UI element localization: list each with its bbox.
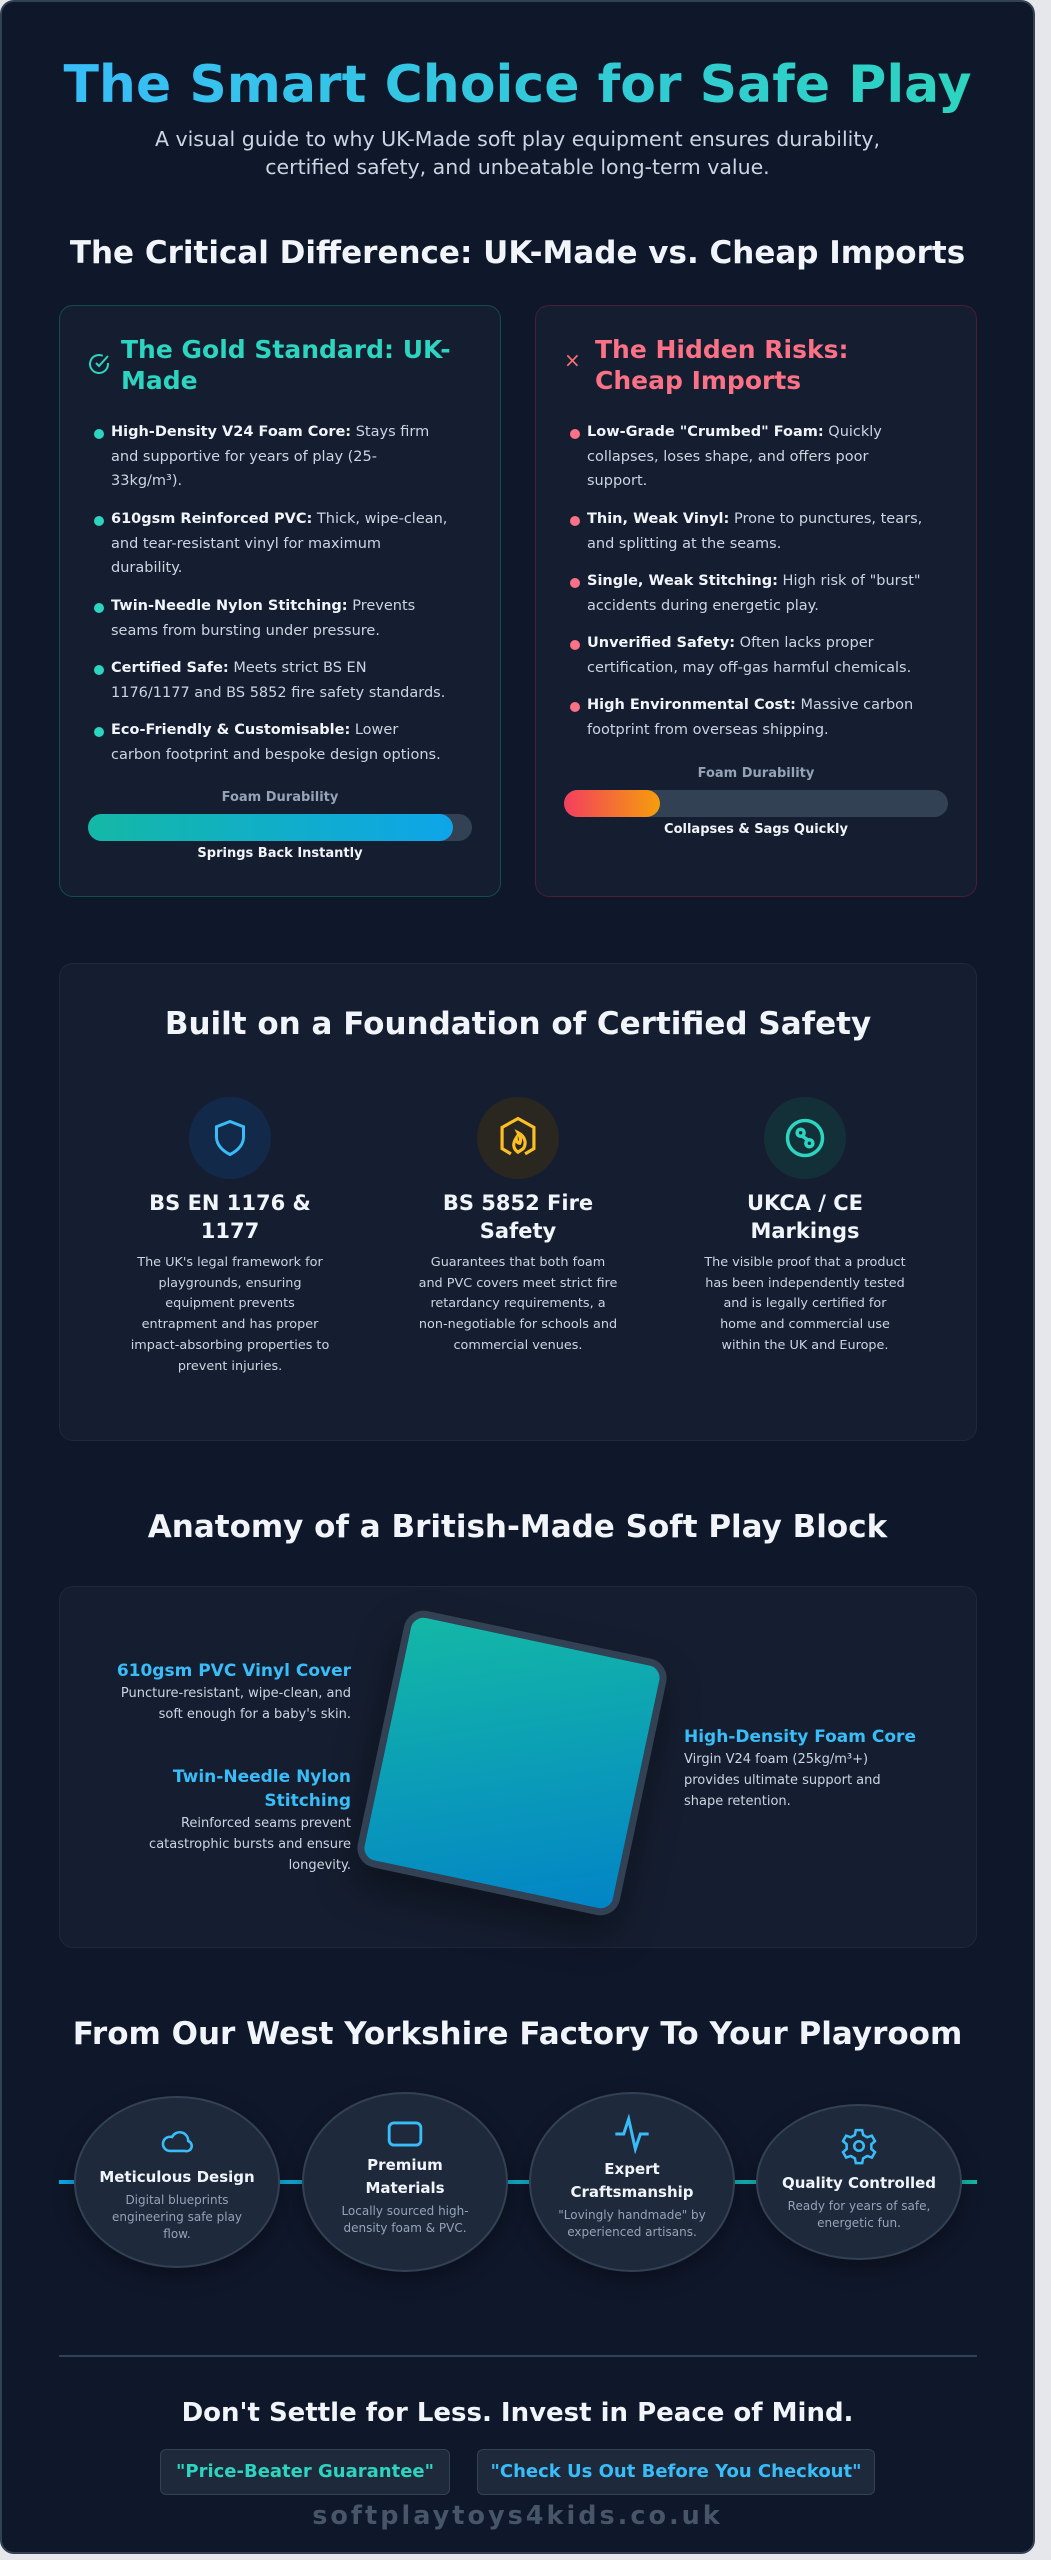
cert: BS EN 1176: playgrounds, ensuring [158,1276,301,1291]
label: PVC cover [117,1661,351,1722]
panel: UK-made: 1176/1177 and BS 5852 fire safety standards. [111,684,445,700]
panel: cheap imports: High Environmental Cost: Massive carbon [587,697,913,713]
icon: shield [189,1097,271,1179]
panel: cheap imports: footprint from overseas shipping. [587,722,829,738]
cert: BS EN 1176: The UK's legal framework for [137,1255,323,1270]
cert: BS EN 1176: impact-absorbing properties to [131,1338,329,1353]
step: craftsmanship: Craftsmanship [570,2183,694,2201]
panel: cheap imports: Low-Grade "Crumbed" Foam: Quickly [587,424,882,440]
step: materials: Locally sourced high- [341,2204,469,2218]
step: craftsmanship: Expert [604,2160,660,2178]
title: The Smart Choice for Safe Play [63,55,972,115]
durability bar [564,766,948,837]
step: craftsmanship: experienced artisans. [567,2225,697,2239]
panel: UK-made: Certified Safe: Meets strict BS EN [111,660,367,676]
panel: UK-made [59,305,501,897]
label: stitching [149,1767,351,1873]
button: price beater: "Price-Beater Guarantee" [176,2461,434,2482]
panel: UK-made: Eco-Friendly & Customisable: Lower [111,722,398,738]
cert: BS 5852: BS 5852 Fire [443,1191,593,1215]
step: design [74,2096,280,2268]
cert: UKCA: UKCA / CE [747,1191,863,1215]
panel: UK-made: durability. [111,560,182,576]
panel title: The Gold Standard: UK-Made [121,335,451,395]
durability bar [88,790,472,861]
label: PVC cover: soft enough for a baby's skin. [159,1707,351,1722]
cert: BS EN 1176: prevent injuries. [178,1359,282,1374]
panel title: Cheap Imports [595,366,801,395]
heading: factory: From Our West Yorkshire Factory To Your Playroom [73,2016,962,2052]
cert: UKCA: The visible proof that a product [704,1255,906,1270]
step: materials: Materials [365,2179,445,2197]
closing heading: Don't Settle for Less. Invest in Peace of Mind. [182,2398,853,2428]
panel: cheap imports: collapses, loses shape, and offers poor [587,448,868,464]
step: craftsmanship: "Lovingly handmade" by [558,2208,706,2222]
panel: UK-made: and tear-resistant vinyl for maximum [111,536,381,552]
panel: cheap imports [535,305,977,897]
panel: cheap imports: accidents during energetic play. [587,598,819,614]
panel title: The Hidden Risks: [595,335,848,364]
heading: Built on a Foundation of Certified Safety [165,1006,871,1042]
label: foam core: provides ultimate support and [684,1773,881,1788]
icon: link [764,1097,846,1179]
button: price beater [160,2449,450,2495]
step: materials: density foam & PVC. [343,2221,467,2235]
cert: UKCA: and is legally certified for [723,1296,887,1311]
step: design: flow. [163,2227,191,2241]
panel: cheap imports: Single, Weak Stitching: High risk of "burst" [587,573,921,589]
label: stitching: Twin-Needle Nylon [173,1767,351,1787]
step: quality: Ready for years of safe, [788,2199,930,2213]
cert: BS 5852: and PVC covers meet strict fire [419,1276,617,1291]
icon: cloud [162,2131,193,2152]
cert: BS EN 1176: BS EN 1176 & [149,1191,311,1215]
panel: anatomy [59,1586,977,1948]
cert: UKCA [704,1097,906,1353]
icon: pulse [615,2114,649,2154]
panel: UK-made: 610gsm Reinforced PVC: Thick, wipe-clean, [111,511,447,527]
icon: gear [841,2128,877,2164]
subtitle [155,127,880,179]
panel: UK-made: Twin-Needle Nylon Stitching: Prevents [111,598,415,614]
cert: BS 5852: Safety [480,1219,556,1243]
subtitle: certified safety, and unbeatable long-term value. [265,155,770,179]
cert: UKCA: home and commercial use [720,1317,890,1332]
cert: BS 5852: commercial venues. [454,1338,582,1353]
cert: BS EN 1176: 1177 [201,1219,259,1243]
subtitle: A visual guide to why UK-Made soft play equipment ensures durability, [155,127,880,151]
label: stitching: longevity. [289,1858,351,1873]
cert: BS EN 1176 [131,1097,329,1374]
panel: cheap imports: certification, may off-gas harmful chemicals. [587,660,911,676]
panel: cheap imports: support. [587,473,647,489]
cert: BS EN 1176: equipment prevents [165,1296,295,1311]
cert: BS 5852: non-negotiable for schools and [419,1317,617,1332]
panel: certified safety [59,963,977,1441]
heading: critical difference: The Critical Difference: UK-Made vs. Cheap Imports [70,235,965,271]
timeline [59,2092,977,2278]
step: design: Meticulous Design [99,2168,255,2186]
diagram: foam block [354,1607,670,1919]
button: check us out [477,2449,875,2495]
durability bar: Foam Durability [222,790,338,805]
step: materials: Premium [367,2156,443,2174]
label: stitching: Stitching [264,1791,351,1811]
durability bar: Collapses & Sags Quickly [664,822,848,837]
label: foam core: shape retention. [684,1794,791,1809]
label: foam core [684,1727,916,1809]
cert: UKCA: has been independently tested [705,1276,905,1291]
panel: UK-made: and supportive for years of play (25- [111,448,377,464]
bullet list [570,424,922,738]
label: foam core: High-Density Foam Core [684,1727,916,1747]
cert: BS 5852: Guarantees that both foam [431,1255,605,1270]
icon: fire hexagon [477,1097,559,1179]
panel: UK-made: 33kg/m³). [111,473,182,489]
bullet list [94,424,447,762]
durability bar: Springs Back Instantly [197,846,363,861]
panel: cheap imports: and splitting at the seams. [587,536,781,552]
icon: materials [388,2122,422,2146]
icon: check [89,354,109,374]
panel title [595,335,848,395]
step: quality [756,2104,962,2260]
cert: UKCA: Markings [750,1219,860,1243]
cert: BS 5852 [419,1097,617,1353]
cert: UKCA: within the UK and Europe. [722,1338,888,1353]
panel: UK-made: High-Density V24 Foam Core: Stays firm [111,424,429,440]
panel: UK-made: carbon footprint and bespoke design options. [111,746,441,762]
label: stitching: Reinforced seams prevent [181,1816,351,1831]
durability bar: Foam Durability [698,766,814,781]
label: foam core: Virgin V24 foam (25kg/m³+) [684,1752,868,1767]
icon: cross: × [564,348,581,372]
step: materials [302,2092,508,2272]
step: quality: Quality Controlled [782,2174,936,2192]
label: stitching: catastrophic bursts and ensure [149,1837,351,1852]
step: craftsmanship [529,2092,735,2272]
panel: UK-made: seams from bursting under pressure. [111,622,380,638]
button: check us out: "Check Us Out Before You Checkout" [491,2461,861,2482]
heading: anatomy: Anatomy of a British-Made Soft Play Block [148,1509,887,1545]
panel: cheap imports: Thin, Weak Vinyl: Prone to punctures, tears, [587,511,922,527]
step: design: Digital blueprints [125,2193,229,2207]
footer url: softplaytoys4kids.co.uk [312,2501,723,2531]
cert: BS EN 1176: entrapment and has proper [142,1317,318,1332]
step: design: engineering safe play [112,2210,242,2224]
panel: cheap imports: Unverified Safety: Often lacks proper [587,635,874,651]
step: quality: energetic fun. [817,2216,901,2230]
cert: BS 5852: retardancy requirements, a [430,1296,606,1311]
label: PVC cover: Puncture-resistant, wipe-clean, and [121,1686,351,1701]
label: PVC cover: 610gsm PVC Vinyl Cover [117,1661,351,1681]
